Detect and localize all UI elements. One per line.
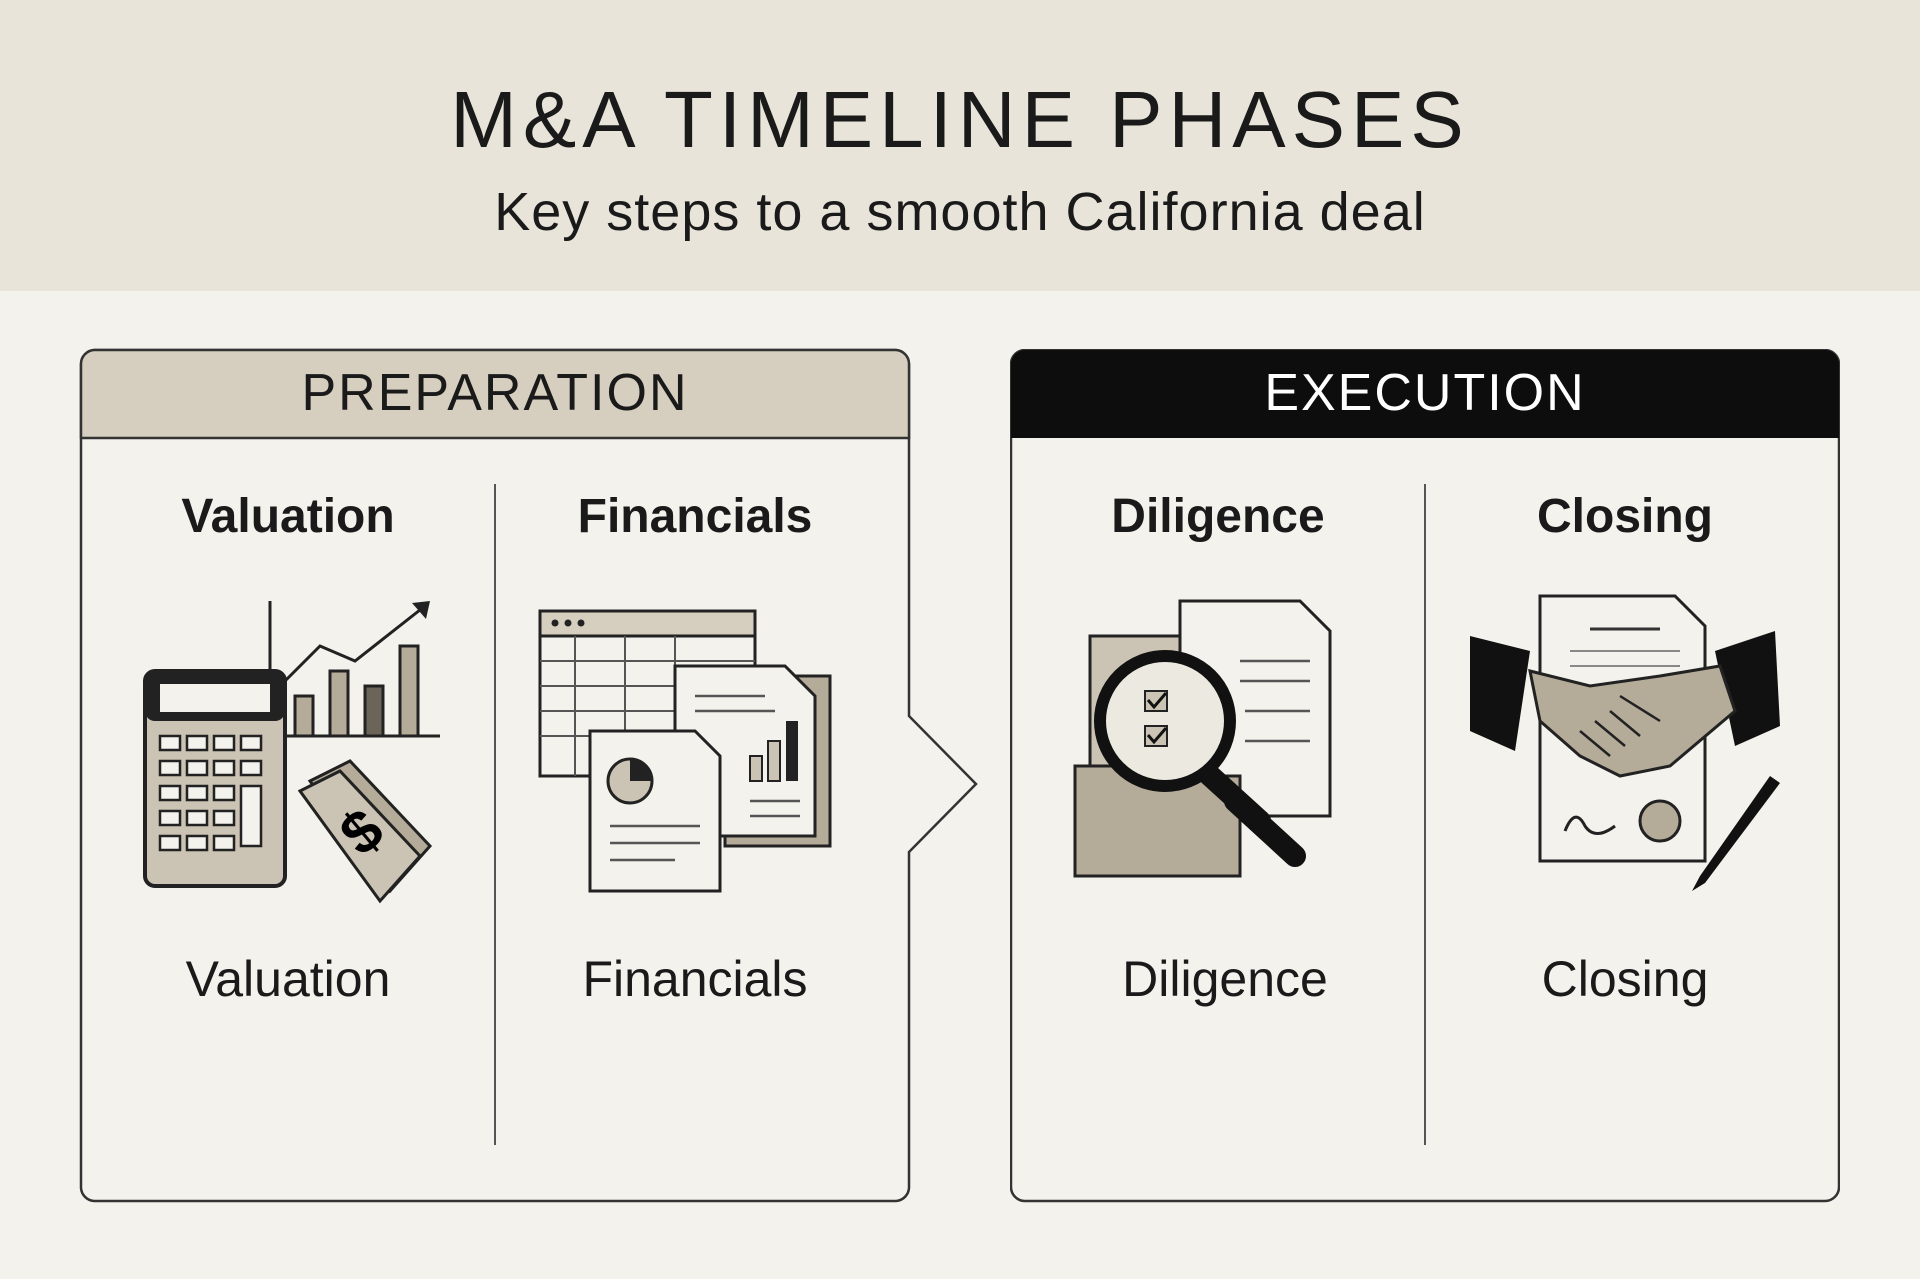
icon: calculator and chart: $ xyxy=(327,795,396,868)
icon: calculator and chart xyxy=(143,601,440,904)
label: closing: Closing xyxy=(1542,951,1708,1007)
preparation header: PREPARATION xyxy=(301,364,688,422)
label: valuation: Valuation xyxy=(186,951,390,1007)
subtitle: Key steps to a smooth California deal xyxy=(494,182,1426,242)
title: M&A TIMELINE PHASES xyxy=(450,75,1470,164)
column: financials: Financials xyxy=(578,490,812,543)
column: valuation xyxy=(143,490,440,1007)
header band xyxy=(0,0,1920,291)
column: closing xyxy=(1470,490,1780,1007)
label: financials: Financials xyxy=(582,951,808,1007)
icon: financial documents xyxy=(538,610,832,892)
column: financials xyxy=(538,490,832,1007)
column: diligence: Diligence xyxy=(1111,490,1325,543)
column: valuation: Valuation xyxy=(181,490,395,543)
panel: execution xyxy=(1010,349,1840,1202)
panel: preparation xyxy=(80,348,978,1202)
icon: magnifier over documents xyxy=(1074,600,1332,878)
icon: handshake over contract xyxy=(1470,594,1780,891)
column: diligence xyxy=(1074,490,1332,1007)
label: diligence: Diligence xyxy=(1122,951,1328,1007)
execution header: EXECUTION xyxy=(1264,364,1586,422)
column: closing: Closing xyxy=(1537,490,1713,543)
